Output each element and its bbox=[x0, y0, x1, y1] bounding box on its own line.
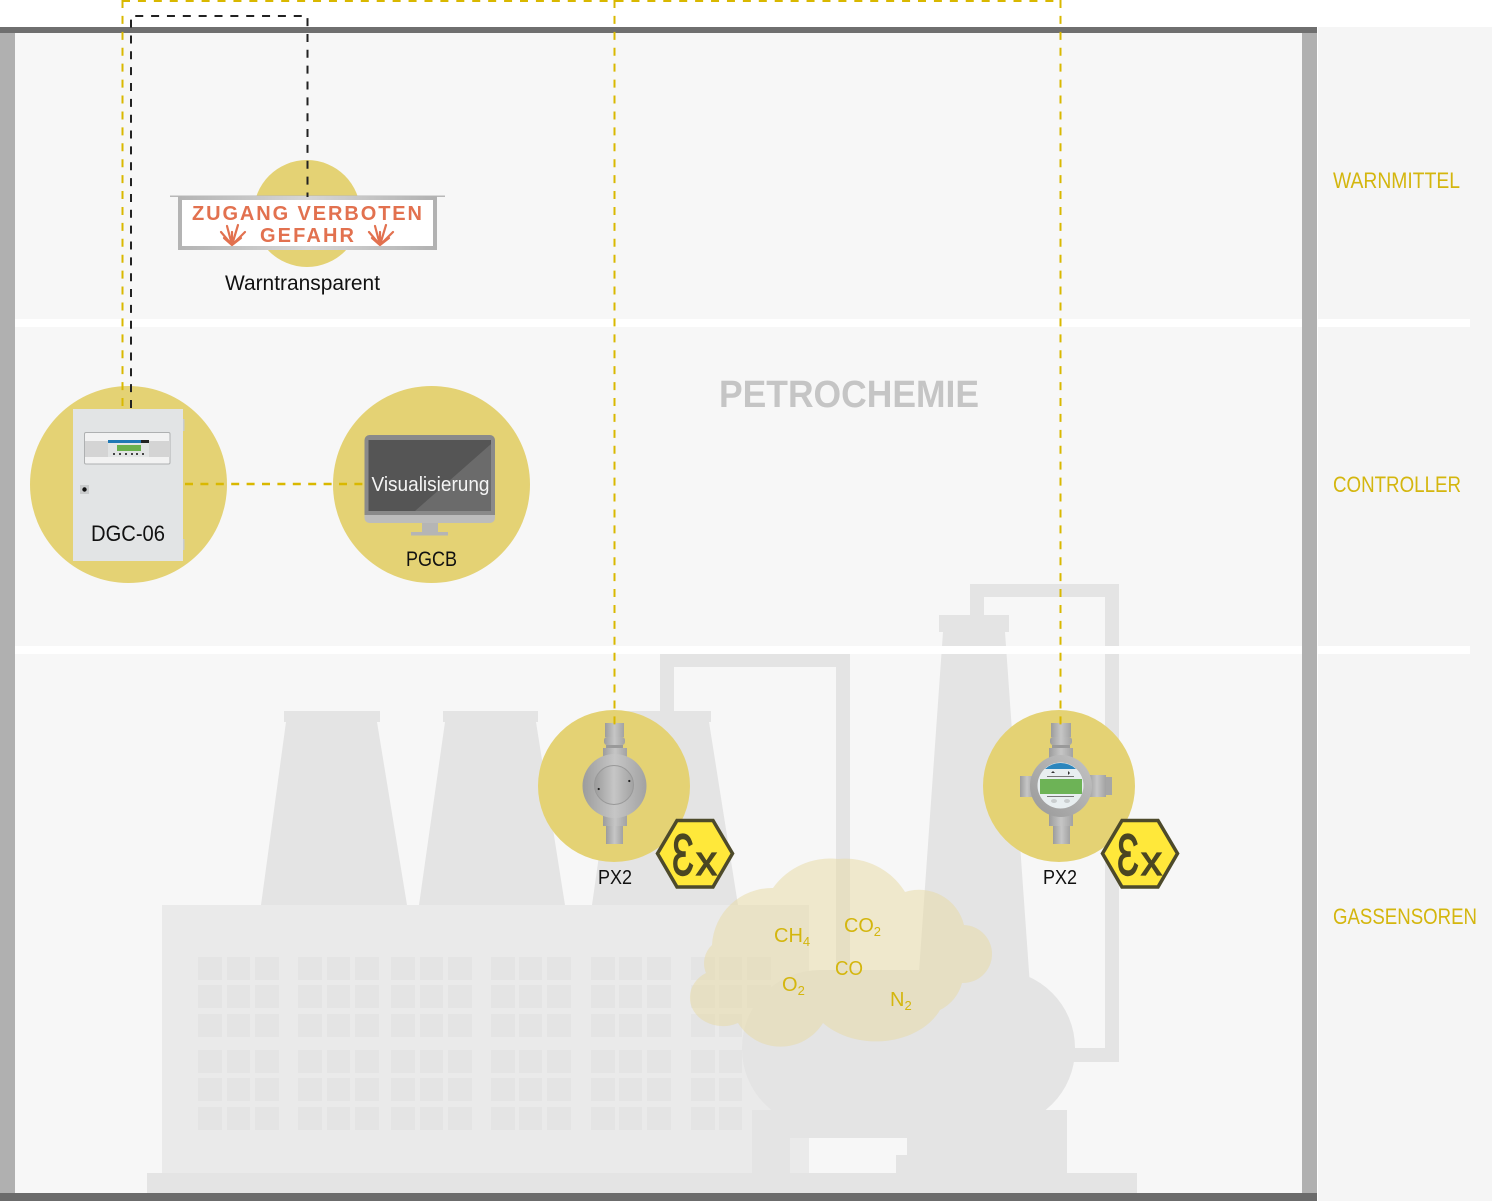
sensor body bbox=[1020, 723, 1112, 844]
yellow circle bbox=[983, 710, 1135, 862]
cabinet bbox=[73, 409, 183, 561]
pipe from chimney 3 bbox=[660, 654, 850, 1000]
icon: explosion right bbox=[369, 225, 393, 245]
sign panel bbox=[180, 198, 435, 248]
background panel: category column bbox=[1318, 27, 1492, 1201]
label: CH4: 4 bbox=[803, 934, 810, 949]
cabinet hinges bbox=[182, 419, 184, 550]
sign bracket line bbox=[170, 196, 445, 197]
heading: Petrochemie: PETROCHEMIE bbox=[719, 374, 979, 416]
connection: black signal line bbox=[131, 16, 308, 408]
factory silhouette bbox=[147, 584, 1137, 1193]
label: O2: 2 bbox=[798, 983, 805, 998]
label: CH4: CH bbox=[774, 925, 803, 947]
gas sensor: PX2 right bbox=[983, 710, 1135, 889]
sign text line 1: ZUGANG VERBOTEN bbox=[192, 203, 422, 225]
lock bbox=[80, 485, 89, 494]
connection: controller to visualization bbox=[185, 483, 365, 485]
gas sensor: PX2 left bbox=[538, 710, 690, 889]
building windows bbox=[198, 957, 771, 1130]
visualization: PGCB bbox=[333, 386, 530, 583]
category label: Gassensoren: GASSENSOREN bbox=[1333, 904, 1477, 929]
tank base bbox=[752, 1110, 1067, 1173]
yellow circle bbox=[30, 386, 227, 583]
chimney 3 bbox=[592, 711, 738, 905]
caption: DGC-06 bbox=[91, 521, 165, 546]
tank base opening shade bbox=[790, 1138, 809, 1173]
label: CO2: CO bbox=[844, 915, 874, 937]
connection: yellow bus lines bbox=[122, 0, 1060, 725]
sensor body bbox=[582, 723, 646, 844]
monitor bbox=[364, 435, 495, 536]
label: CO2: 2 bbox=[874, 924, 881, 939]
caption: Warntransparent bbox=[225, 272, 380, 295]
caption: PGCB bbox=[406, 548, 457, 571]
label: N2: 2 bbox=[904, 998, 912, 1013]
gas cloud bbox=[690, 859, 992, 1047]
icon: Ex hazard mark right: Ɛ bbox=[1117, 823, 1139, 888]
category label: Warnmittel: WARNMITTEL bbox=[1333, 168, 1460, 193]
yellow circle bbox=[538, 710, 690, 862]
caption: PX2 bbox=[598, 867, 632, 889]
yellow circle bbox=[333, 386, 530, 583]
icon: Ex hazard mark left: x bbox=[696, 837, 717, 884]
pipe from tall chimney bbox=[970, 584, 1119, 1062]
warning device: Warntransparent bbox=[170, 160, 445, 295]
tank base opening bbox=[809, 1138, 907, 1173]
gas labels bbox=[774, 915, 912, 1013]
category label: Controller: CONTROLLER bbox=[1333, 472, 1461, 497]
controller: DGC-06 bbox=[30, 386, 227, 583]
yellow circle bbox=[254, 160, 360, 267]
chimney 2 bbox=[419, 711, 565, 905]
icon: Ex hazard mark right bbox=[1102, 820, 1178, 888]
zone divider bands bbox=[15, 319, 1470, 654]
chimney 1 bbox=[261, 711, 407, 905]
label: CO: CO bbox=[835, 958, 863, 980]
sign text line 2: GEFAHR bbox=[260, 225, 355, 247]
factory ground slab bbox=[147, 1173, 1137, 1193]
main building bbox=[162, 905, 809, 1173]
icon: Ex hazard mark left bbox=[658, 820, 732, 888]
controller panel bbox=[84, 432, 170, 464]
tank bbox=[742, 970, 1075, 1127]
icon: explosion left bbox=[221, 225, 245, 245]
label: N2: N bbox=[890, 989, 904, 1011]
caption: PX2 bbox=[1043, 867, 1077, 889]
monitor label: Visualisierung bbox=[372, 474, 490, 496]
label: O2: O bbox=[782, 974, 798, 996]
icon: Ex hazard mark right: x bbox=[1141, 837, 1162, 884]
icon: Ex hazard mark left: Ɛ bbox=[672, 823, 694, 888]
tall chimney bbox=[917, 615, 1031, 1000]
